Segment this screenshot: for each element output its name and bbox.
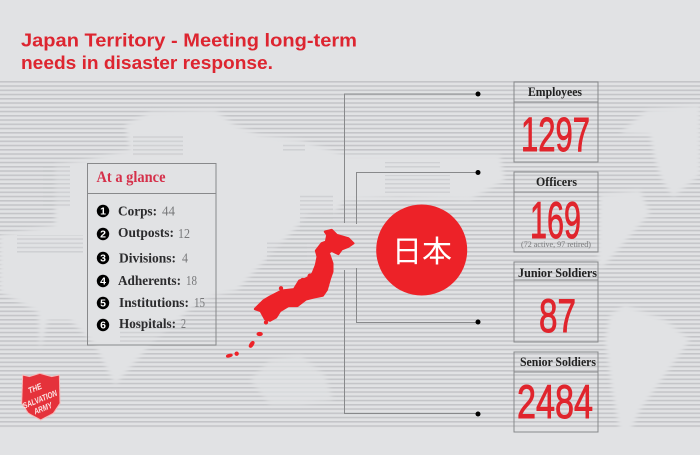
item: hospitals: 6	[100, 320, 106, 332]
stat: employees: Employees	[528, 84, 582, 99]
connector dot: junior soldiers	[476, 320, 480, 324]
connector dot: employees	[476, 92, 480, 96]
item: institutions: 5	[100, 298, 106, 310]
item: outposts: 12	[178, 226, 190, 241]
red circle: Japan in kanji: 日本	[392, 236, 452, 269]
item: hospitals: 2	[181, 316, 186, 331]
item: adherents	[97, 273, 197, 288]
item: outposts: 2	[100, 229, 106, 241]
stat: senior soldiers: Senior Soldiers	[520, 354, 596, 369]
item: corps	[97, 204, 175, 218]
panel: at a glance	[88, 164, 216, 345]
stat: officers	[514, 172, 598, 252]
item: corps: Corps:	[118, 204, 157, 218]
item: divisions: Divisions:	[119, 250, 176, 266]
item: adherents: 18	[186, 273, 197, 288]
item: adherents: 4	[100, 276, 106, 288]
connector dot: officers	[476, 170, 480, 175]
connector dot: senior soldiers	[476, 412, 480, 416]
stat: officers: (72 active, 97 retired)	[521, 240, 591, 249]
item: institutions: Institutions:	[119, 295, 189, 310]
stat: employees	[514, 82, 598, 162]
stat: senior soldiers	[514, 352, 598, 432]
item: divisions: 4	[182, 250, 188, 266]
striped world map	[0, 81, 700, 432]
item: corps: 1	[100, 206, 106, 218]
heading: at a glance: At a glance	[96, 169, 166, 186]
item: divisions: 3	[100, 253, 106, 265]
stat: junior soldiers: Junior Soldiers	[518, 265, 597, 280]
item: divisions	[97, 250, 188, 266]
map of japan	[227, 230, 353, 357]
logo: salvation army shield: THE	[27, 381, 43, 395]
logo: salvation army shield: SALVATION	[21, 388, 59, 411]
title: needs in disaster response.	[21, 52, 273, 73]
stat: junior soldiers: 87	[539, 289, 576, 342]
item: corps: 44	[162, 204, 175, 218]
stat: officers: Officers	[536, 174, 577, 189]
item: institutions	[97, 295, 205, 310]
item: hospitals	[97, 316, 186, 332]
item: outposts: Outposts:	[118, 225, 174, 240]
logo: salvation army shield	[21, 373, 60, 420]
connector lines	[344, 94, 478, 414]
stat: senior soldiers: 2484	[517, 375, 593, 428]
title: Japan Territory - Meeting long-term	[21, 30, 357, 50]
logo: salvation army shield: ARMY	[31, 400, 54, 417]
item: hospitals: Hospitals:	[119, 316, 176, 331]
stat: employees: 1297	[521, 109, 590, 162]
item: outposts	[97, 225, 190, 241]
item: adherents: Adherents:	[118, 273, 181, 288]
item: institutions: 15	[194, 295, 205, 310]
stat: junior soldiers	[514, 262, 598, 342]
stat: officers: 169	[530, 192, 581, 250]
red circle: Japan in kanji	[376, 204, 467, 296]
